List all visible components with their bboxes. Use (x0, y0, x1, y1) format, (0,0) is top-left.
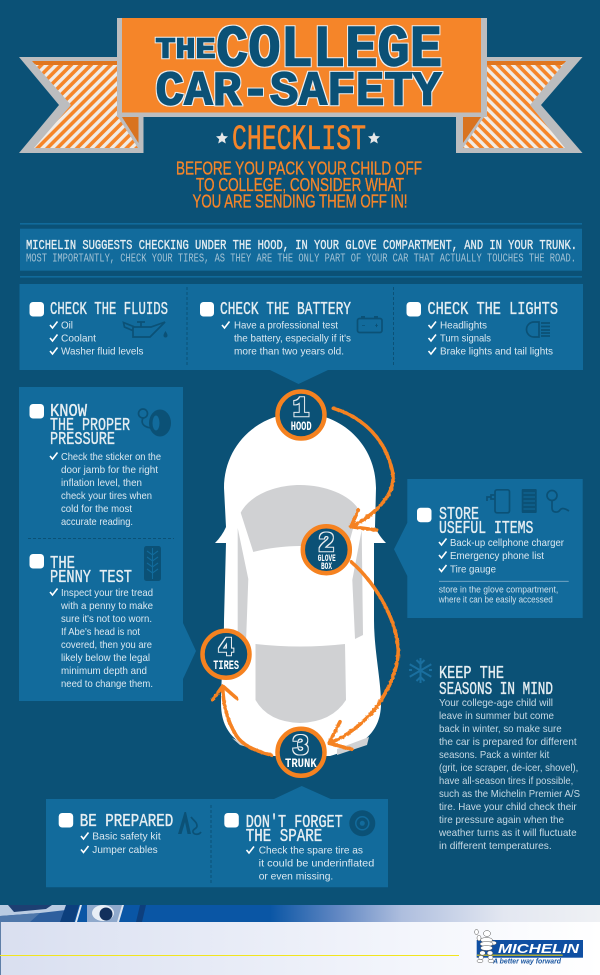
check the fluids: Washer fluid levels (61, 346, 144, 358)
panel: keep the seasons in mind: KEEP THE (439, 664, 504, 684)
arrow: trunk to tires (213, 686, 271, 755)
check the fluids (30, 300, 168, 358)
arrow: glove box to trunk (329, 562, 398, 749)
panel: keep the seasons in mind: such as the Michelin Premier A/S (439, 788, 580, 800)
know the proper pressure (30, 402, 171, 528)
title: THE (156, 34, 216, 66)
don't forget the spare: it could be underinflated (259, 858, 374, 870)
know the proper pressure: Check the sticker on the (61, 451, 161, 463)
know the proper pressure: accurate reading. (61, 516, 133, 528)
know the proper pressure: THE PROPER (50, 416, 130, 436)
panel: keep the seasons in mind: back in winter, so make sure (439, 723, 562, 735)
footer: yellow rule (0, 955, 459, 956)
icon: tire gauge (547, 490, 569, 512)
check the battery (200, 300, 382, 358)
logo: michelin (475, 929, 583, 966)
be prepared: BE PREPARED (80, 812, 173, 832)
icon: bibendum (475, 929, 496, 963)
badge 2: glove box: 2 (318, 530, 334, 560)
check the fluids: Coolant (61, 332, 96, 344)
subtitle: TO COLLEGE, CONSIDER WHAT (196, 174, 404, 195)
know the proper pressure: KNOW (50, 402, 87, 422)
check the battery: CHECK THE BATTERY (220, 300, 351, 320)
check the lights: Headlights (440, 320, 487, 332)
banner: title ribbon (19, 16, 582, 153)
icon: brake disc (349, 810, 375, 836)
logo: michelin: MICHELIN (498, 942, 580, 956)
panel: keep the seasons in mind: seasons. Pack a winter kit (439, 749, 549, 761)
badge 1: hood (278, 392, 324, 438)
windshield (241, 485, 358, 552)
the penny test: PENNY TEST (50, 568, 132, 588)
badge 4: tires: 4 (218, 633, 234, 663)
badge 4: tires: TIRES (213, 658, 239, 673)
panel: keep the seasons in mind: leave in summer but come (439, 710, 554, 722)
intro text (26, 239, 577, 266)
don't forget the spare: THE SPARE (246, 827, 322, 847)
the penny test (30, 546, 161, 690)
check the battery: Have a professional test (234, 320, 338, 332)
icon: headlight (527, 322, 550, 337)
panel: store useful items: Emergency phone list (450, 550, 544, 562)
icon: emergency list (522, 489, 537, 513)
heading: checklist: CHECKLIST (232, 120, 366, 160)
the penny test: likely below the legal (61, 652, 150, 664)
logo: michelin: A better way forward (492, 958, 562, 966)
icon: star left (216, 132, 228, 144)
check the lights: CHECK THE LIGHTS (428, 300, 558, 320)
subtitle (176, 158, 422, 212)
panel: keep the seasons in mind: weather turns as it will fluctuate (438, 827, 577, 839)
panel: keep the seasons in mind: in different temperatures. (439, 840, 552, 852)
panel: keep the seasons in mind: have all-season tires if possible, (439, 775, 573, 787)
the penny test: If Abe's head is not (61, 626, 140, 638)
icon: oil can (124, 322, 168, 338)
panel: trunk (46, 786, 388, 887)
title (156, 16, 442, 119)
panel: keep the seasons in mind: (grit, ice scraper, de-icer, shovel), (439, 762, 578, 774)
panel: keep the seasons in mind (409, 658, 580, 852)
footer (0, 905, 600, 975)
check the lights: Turn signals (440, 332, 491, 344)
badge 2: glove box: GLOVE (318, 554, 336, 565)
the penny test: sure it's not too worn. (61, 613, 152, 625)
icon: tire gauge (138, 409, 171, 436)
don't forget the spare: DON'T FORGET (246, 813, 343, 833)
icon: snowflake (409, 658, 432, 683)
badge 3: trunk: 3 (292, 732, 309, 763)
footer: white area (0, 922, 600, 975)
car body (215, 413, 386, 756)
badge 2: glove box: BOX (321, 562, 332, 573)
title: CAR-SAFETY (156, 65, 442, 119)
icon: phone with charger (487, 490, 510, 513)
arrow: hood to glove box (333, 408, 393, 530)
be prepared: Basic safety kit (92, 830, 161, 842)
panel: store useful items: USEFUL ITEMS (439, 519, 533, 539)
check the fluids: CHECK THE FLUIDS (50, 300, 168, 320)
ribbon: right tail (456, 57, 582, 153)
the penny test: with a penny to make (60, 600, 153, 612)
the penny test: minimum depth and (61, 665, 147, 677)
panel: keep the seasons in mind: tire. Have your child check their (439, 801, 577, 813)
footer: photo strip (0, 905, 146, 922)
know the proper pressure: check your tires when (61, 490, 152, 502)
check the battery: more than two years old. (234, 346, 344, 358)
know the proper pressure: cold for the most (61, 503, 132, 515)
panel: store useful items: store in the glove compartment, (439, 584, 558, 594)
arrows (213, 408, 398, 755)
panel: tires (19, 387, 196, 701)
icon: star right (368, 132, 380, 144)
be prepared (59, 812, 201, 856)
panel: keep the seasons in mind: SEASONS IN MIND (439, 680, 553, 700)
don't forget the spare: or even missing. (259, 870, 333, 882)
subtitle: BEFORE YOU PACK YOUR CHILD OFF (176, 158, 422, 178)
ribbon: left tail (19, 57, 144, 153)
panel: keep the seasons in mind: tire pressure again when the (439, 814, 564, 826)
check the fluids: Oil (61, 320, 73, 332)
panel: store useful items: STORE (439, 505, 479, 525)
icon: tire tread (144, 546, 161, 581)
title: COLLEGE (216, 16, 442, 83)
side windows (238, 528, 363, 643)
footer: gradient band (0, 905, 600, 922)
know the proper pressure: PRESSURE (50, 430, 115, 450)
check the lights: Brake lights and tail lights (440, 346, 553, 358)
panel: store useful items (394, 479, 583, 618)
badge 1: hood: HOOD (291, 419, 312, 434)
the penny test: covered, then you are (61, 639, 152, 651)
badge 4: tires (202, 631, 250, 678)
panel: under the hood (20, 284, 583, 384)
banner: orange panel (117, 18, 487, 117)
don't forget the spare (224, 810, 375, 882)
icon: jumper cables (178, 812, 201, 834)
know the proper pressure: inflation level, then (61, 477, 142, 489)
car illustration (215, 413, 386, 756)
know the proper pressure: door jamb for the right (61, 464, 158, 476)
be prepared: Jumper cables (92, 844, 158, 856)
icon: battery (358, 316, 382, 332)
check the battery: the battery, especially if it's (234, 332, 351, 344)
badge 3: trunk (278, 729, 324, 776)
panel: keep the seasons in mind: the car is prepared for different (439, 736, 577, 748)
the penny test: THE (50, 554, 75, 574)
panel: store useful items: Tire gauge (450, 564, 496, 576)
subtitle: YOU ARE SENDING THEM OFF IN! (192, 190, 408, 212)
check the lights (406, 300, 558, 358)
the penny test: Inspect your tire tread (61, 587, 153, 599)
rear lights (232, 737, 369, 755)
badge 1: hood: 1 (293, 394, 309, 425)
badge 2: glove box (303, 526, 350, 573)
rear window (256, 644, 346, 723)
don't forget the spare: Check the spare tire as (259, 844, 363, 856)
panel: keep the seasons in mind: Your college-age child will (439, 697, 553, 709)
panel: store useful items: Back-up cellphone charger (450, 537, 564, 549)
intro band (20, 223, 582, 278)
the penny test: need to change them. (61, 678, 153, 690)
panel: store useful items: where it can be easily accessed (438, 594, 553, 604)
badge 3: trunk: TRUNK (285, 756, 317, 771)
